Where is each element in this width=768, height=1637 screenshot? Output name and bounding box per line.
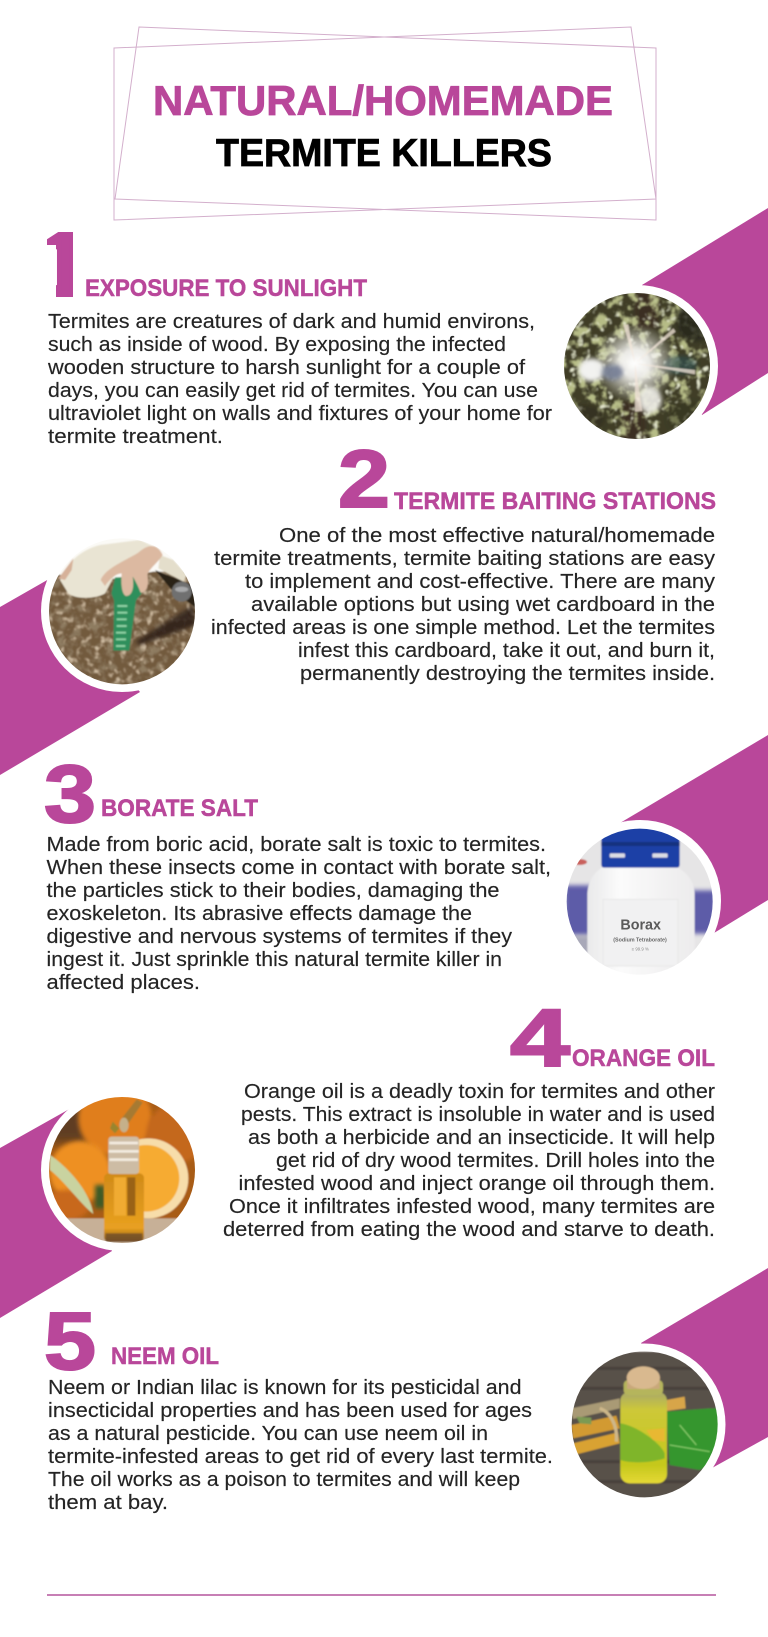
text block 2: termite treatments, termite baiting stations are easy — [214, 548, 715, 570]
panel: 5 neem oil — [44, 1268, 768, 1514]
text block 3: exoskeleton. Its abrasive effects damage the — [46, 903, 472, 925]
number 2: 2 — [338, 434, 390, 525]
text block 3 — [46, 834, 551, 994]
text block 2: infected areas is one simple method. Let the termites — [211, 617, 715, 639]
text block 3: When these insects come in contact with borate salt, — [46, 857, 551, 879]
label text — [614, 920, 666, 950]
photo: orange oil bottle — [49, 1097, 195, 1243]
text block 3: the particles stick to their bodies, damaging the — [46, 880, 500, 902]
heading 4: ORANGE OIL — [572, 1045, 715, 1072]
text block 2: infest this cardboard, take it out, and burn it, — [298, 640, 715, 662]
title: NATURAL/HOMEMADE — [153, 77, 613, 124]
title: TERMITE KILLERS — [216, 132, 552, 175]
text block 3: digestive and nervous systems of termites if they — [46, 926, 512, 948]
title — [153, 77, 613, 175]
ring 4 — [41, 1089, 203, 1251]
band 1 — [642, 208, 768, 415]
footer rule — [47, 1594, 716, 1596]
text block 4: as both a herbicide and an insecticide. It will help — [248, 1127, 715, 1149]
photo: neem oil bottle — [570, 1352, 720, 1502]
heading 2: TERMITE BAITING STATIONS — [394, 488, 716, 515]
text block 4: Orange oil is a deadly toxin for termites and other — [244, 1081, 715, 1103]
number 1: 1 — [38, 215, 89, 317]
label text: (Sodium Tetraborate) — [613, 937, 667, 943]
text block 4: deterred from eating the wood and starve to death. — [223, 1219, 715, 1241]
photo: bait station in soil — [47, 537, 197, 687]
text block 2: available options but using wet cardboard in the — [251, 594, 715, 616]
label text: Borax — [620, 917, 661, 933]
band 3 — [620, 735, 768, 933]
text block 3: affected places. — [46, 972, 200, 994]
number 3: 3 — [44, 749, 96, 840]
band 4 — [0, 1107, 112, 1318]
text block 5: Neem or Indian lilac is known for its pesticidal and — [48, 1377, 522, 1399]
panel: 4 orange oil — [0, 993, 715, 1318]
text block 2: permanently destroying the termites inside. — [300, 663, 715, 685]
title frame — [114, 27, 656, 220]
text block 5: termite-infested areas to get rid of every last termite. — [48, 1446, 553, 1468]
text block 4: Once it infiltrates infested wood, many termites are — [229, 1196, 715, 1218]
text block 3: Made from boric acid, borate salt is toxic to termites. — [46, 834, 546, 856]
heading 5: NEEM OIL — [111, 1343, 219, 1370]
label text: ≥ 99.9 % — [632, 947, 649, 952]
photo: sunlight through trees — [562, 292, 713, 442]
text block 2: One of the most effective natural/homemade — [279, 525, 715, 547]
ring 3 — [559, 820, 721, 982]
text block 5: as a natural pesticide. You can use neem oil in — [48, 1423, 488, 1445]
text block 1: ultraviolet light on walls and fixtures of your home for — [48, 403, 552, 425]
text block 1: termite treatment. — [48, 426, 223, 448]
number 5: 5 — [44, 1296, 96, 1387]
heading 3: BORATE SALT — [101, 795, 258, 822]
text block 1: days, you can easily get rid of termites. You can use — [48, 380, 538, 402]
text block 3: ingest it. Just sprinkle this natural termite killer in — [46, 949, 502, 971]
text block 4: get rid of dry wood termites. Drill holes into the — [276, 1150, 715, 1172]
text block 4: infested wood and inject orange oil through them. — [238, 1173, 715, 1195]
text block 1: Termites are creatures of dark and humid environs, — [48, 311, 535, 333]
text block 5: them at bay. — [48, 1492, 168, 1514]
ring 5 — [564, 1344, 726, 1506]
text block 1: such as inside of wood. By exposing the infected — [48, 334, 506, 356]
panel: 2 termite baiting stations — [0, 434, 716, 775]
text block 1: wooden structure to harsh sunlight for a couple of — [47, 357, 525, 379]
photo: borax bottle — [565, 827, 716, 979]
ring 1 — [556, 285, 718, 447]
text block 5: insecticidal properties and has been used for ages — [48, 1400, 532, 1422]
text block 5 — [48, 1377, 553, 1514]
band 2 — [0, 579, 140, 775]
number 4: 4 — [510, 993, 571, 1084]
text block 5: The oil works as a poison to termites and will keep — [48, 1469, 520, 1491]
text block 1 — [47, 311, 552, 448]
panel: 1 exposure to sunlight — [38, 208, 768, 448]
text block 2 — [211, 525, 715, 685]
heading 1: EXPOSURE TO SUNLIGHT — [85, 275, 367, 302]
band 5 — [641, 1268, 768, 1468]
text block 2: to implement and cost-effective. There are many — [245, 571, 715, 593]
text block 4 — [223, 1081, 715, 1241]
panel: 3 borate salt — [44, 735, 768, 994]
text block 4: pests. This extract is insoluble in water and is used — [241, 1104, 715, 1126]
ring 2 — [41, 530, 203, 692]
